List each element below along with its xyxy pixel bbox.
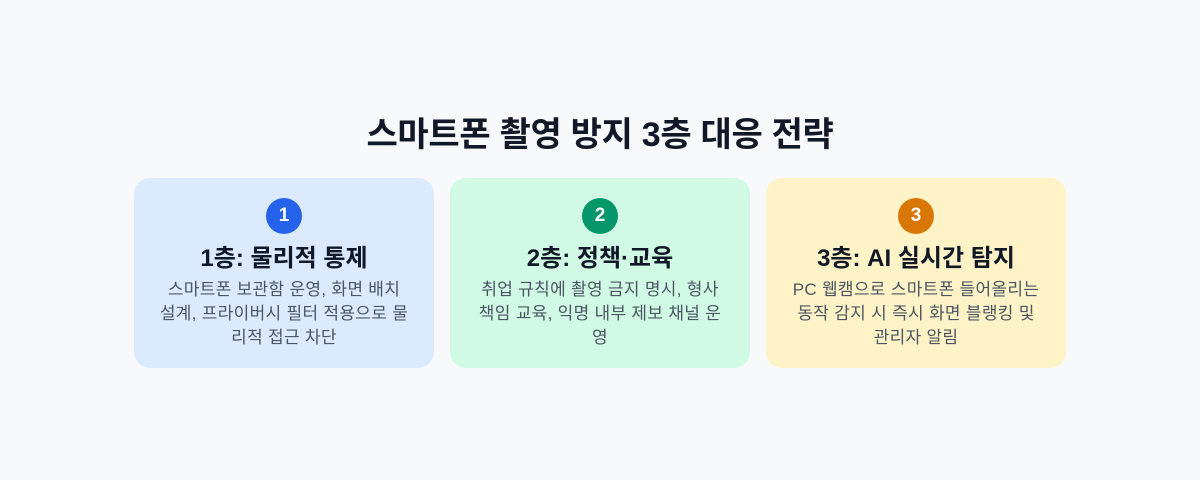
panel: layer 1 xyxy=(134,178,434,368)
text: layer 3: 동작 감지 시 즉시 화면 블랭킹 및 xyxy=(797,304,1035,323)
icon: number 1 xyxy=(266,198,302,234)
icon: number 3 xyxy=(898,198,934,234)
icon: number 3: 3 xyxy=(911,205,921,226)
text: layer 3: PC 웹캠으로 스마트폰 들어올리는 xyxy=(793,280,1039,299)
heading: layer 2: 2층: 정책·교육 xyxy=(527,245,673,272)
text: layer 2 xyxy=(479,280,721,347)
panel: layer 2 xyxy=(450,178,750,368)
text: layer 1 xyxy=(160,280,408,347)
heading: layer 1: 1층: 물리적 통제 xyxy=(200,245,368,272)
text: layer 1: 리적 접근 차단 xyxy=(231,328,337,347)
text: layer 3 xyxy=(793,280,1039,347)
icon: number 2 xyxy=(582,198,618,234)
text: layer 2: 영 xyxy=(592,328,608,347)
text: layer 1: 설계, 프라이버시 필터 적용으로 물 xyxy=(160,304,408,323)
icon: number 2: 2 xyxy=(595,205,605,226)
text: layer 2: 책임 교육, 익명 내부 제보 채널 운 xyxy=(479,304,721,323)
icon: number 1: 1 xyxy=(279,205,289,226)
text: layer 3: 관리자 알림 xyxy=(874,328,958,347)
text: layer 2: 취업 규칙에 촬영 금지 명시, 형사 xyxy=(481,280,719,299)
text: layer 1: 스마트폰 보관함 운영, 화면 배치 xyxy=(168,280,400,299)
panel: layer 3 xyxy=(766,178,1066,368)
title: 스마트폰 촬영 방지 3층 대응 전략 xyxy=(366,116,834,154)
heading: layer 3: 3층: AI 실시간 탐지 xyxy=(817,245,1015,272)
